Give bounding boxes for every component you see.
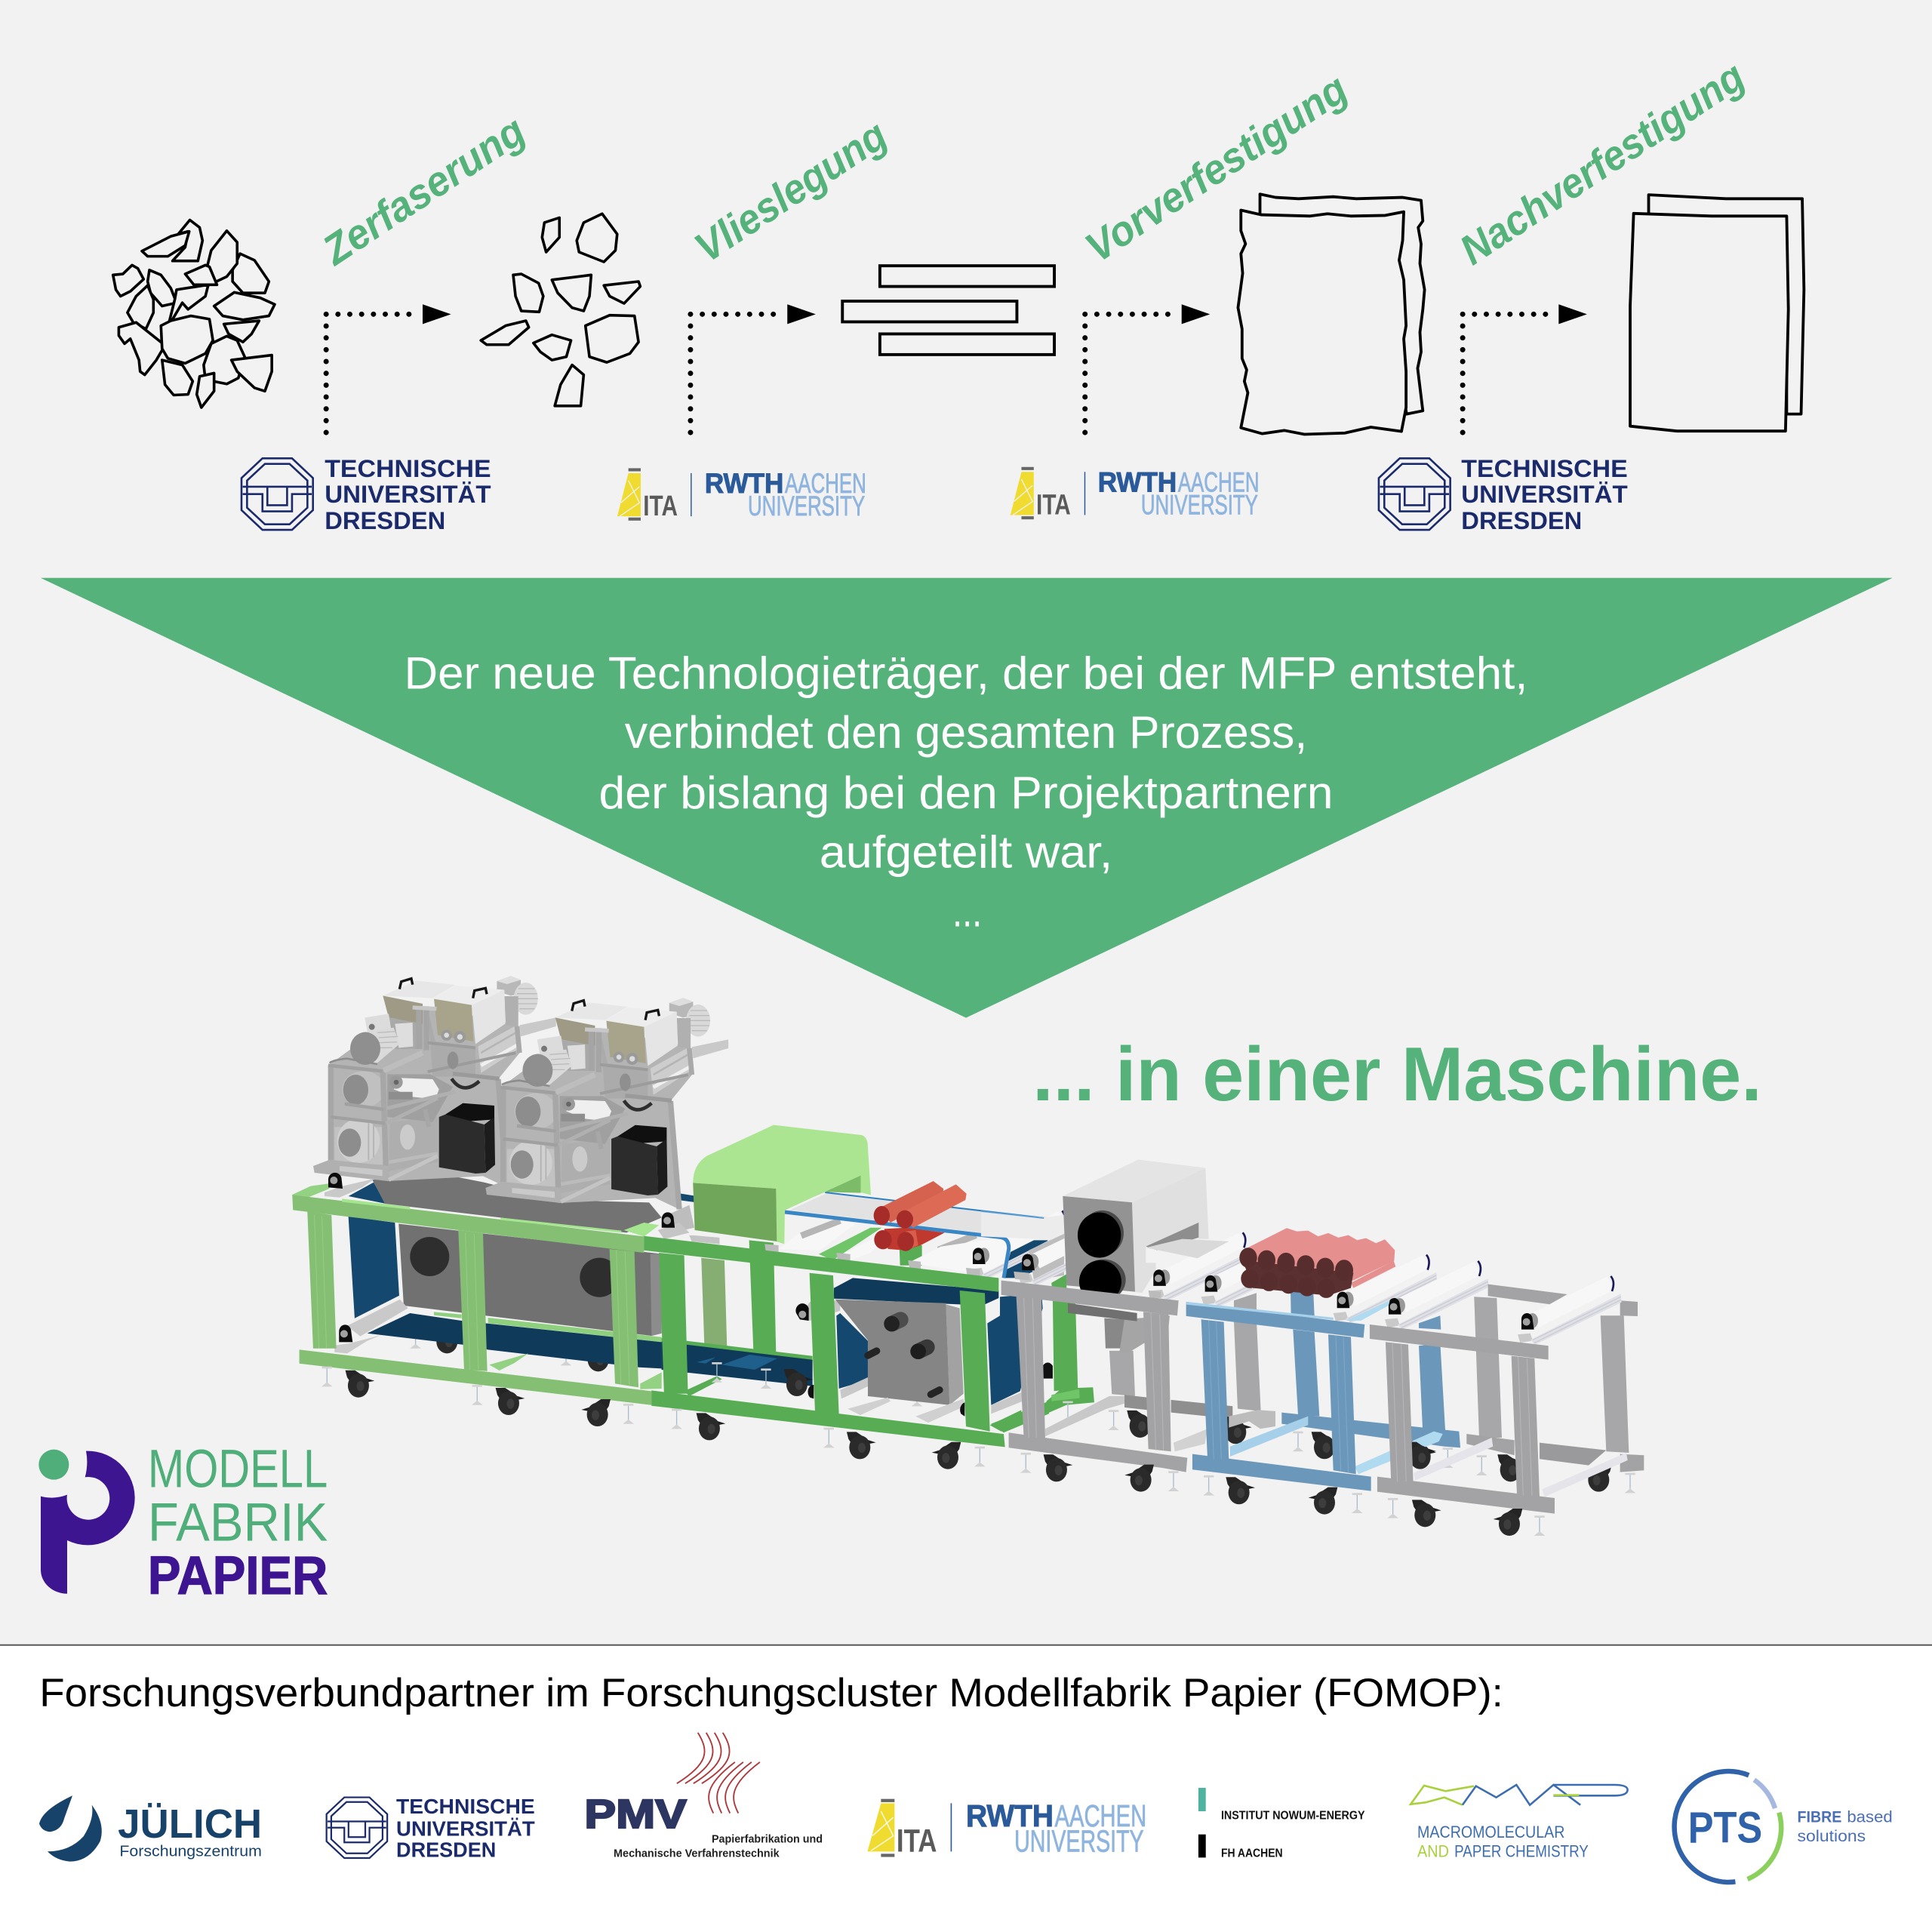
belt end (981, 1211, 1122, 1285)
conveyor rails and rollers below belt (692, 1211, 1073, 1279)
funnel text: Der neue Technologieträger, der bei der MFP entsteht, (405, 648, 1527, 699)
wordmark: PAPIER (148, 1546, 328, 1606)
step icon: wrinkled sheets (1238, 194, 1425, 435)
press rollers (1149, 1232, 1254, 1301)
logo: ITA RWTH footer: AACHEN (1055, 1798, 1146, 1833)
funnel text: verbindet den gesamten Prozess, (625, 706, 1307, 758)
logo: ITA RWTH footer: UNIVERSITY (1014, 1823, 1144, 1858)
logo: Nowum Energy FH Aachen: INSTITUT NOWUM-ENERGY (1221, 1810, 1365, 1823)
logo: ITA RWTH 2: AACHEN (1178, 466, 1260, 497)
suction module 2 (485, 998, 728, 1209)
logo: TU Dresden 2: DRESDEN (1461, 506, 1582, 534)
blue table rear (1230, 1288, 1460, 1474)
logo: ITA RWTH 2: UNIVERSITY (1141, 490, 1258, 521)
step icon: smooth finished sheets (1630, 195, 1804, 431)
funnel text: aufgeteilt war, (820, 826, 1112, 877)
logo: ITA RWTH 1 (617, 468, 866, 521)
panel: green funnel triangle (41, 578, 1893, 1018)
logo: PMV: PMV (584, 1792, 687, 1837)
icon: logo mark (38, 1450, 135, 1594)
step icon: separated fibres (481, 214, 640, 406)
light green frame (292, 1183, 662, 1426)
funnel text: der bislang bei den Projektpartnern (598, 767, 1334, 818)
logo: Jülich: JÜLICH (118, 1801, 262, 1847)
logo: ITA RWTH 2: ITA (1036, 489, 1071, 521)
blue table rollers and frame (1334, 1255, 1489, 1330)
rear legs and lower panels (662, 1240, 922, 1406)
step icon: laid fleece strips (842, 266, 1054, 355)
first grey table frame (1001, 1272, 1187, 1492)
hopper under conveyor (795, 1240, 1048, 1423)
wordmark: FABRIK (148, 1494, 328, 1553)
blue table frame (1186, 1300, 1390, 1515)
arrow: dotted 2 (691, 304, 816, 432)
machine base: blower box and blue panels (334, 1217, 662, 1371)
roller holders on light frame (325, 1173, 694, 1239)
headline: in einer Maschine: ... in einer Maschine. (1032, 1032, 1762, 1117)
step icon: fibre chips cluster (113, 220, 275, 408)
logo: ITA RWTH 1: RWTH (705, 468, 783, 499)
logo: PTS: FIBRE (1798, 1808, 1841, 1826)
logo: Nowum Energy FH Aachen: FH AACHEN (1221, 1847, 1283, 1860)
press underside (1068, 1303, 1170, 1352)
logo: ITA RWTH 1: ITA (643, 490, 678, 521)
logo: Macromolecular and Paper Chemistry: PAPER CHEMISTRY (1454, 1842, 1589, 1861)
logo: TU Dresden 1: TECHNISCHE (325, 454, 491, 482)
logo: TU Dresden footer: UNIVERSITÄT (396, 1817, 535, 1841)
funnel text (405, 648, 1527, 937)
logo: Modellfabrik Papier (38, 1440, 328, 1606)
process label: Vlieslegung: Vlieslegung (687, 111, 895, 271)
logo: PMV: Papierfabrikation und (712, 1834, 823, 1846)
logo: Macromolecular and Paper Chemistry: AND (1417, 1842, 1449, 1861)
press outlet plate (1146, 1239, 1229, 1258)
logo: TU Dresden footer: TECHNISCHE (396, 1795, 535, 1818)
red rolls (874, 1181, 967, 1251)
press and first grey table (981, 1160, 1275, 1492)
logo: ITA RWTH 1: AACHEN (785, 468, 866, 499)
logo: ITA RWTH footer (867, 1798, 1146, 1858)
belt (785, 1192, 1064, 1278)
logo: Jülich: Forschungszentrum (119, 1844, 262, 1860)
logo: ITA RWTH 2: RWTH (1098, 466, 1177, 497)
salmon rolls (1239, 1228, 1395, 1298)
logo: TU Dresden footer: DRESDEN (396, 1838, 496, 1861)
logo: PMV (584, 1733, 823, 1860)
wordmark (148, 1440, 328, 1606)
logo: PMV: Mechanische Verfahrenstechnik (614, 1847, 780, 1860)
logo: ITA RWTH footer: ITA (897, 1823, 937, 1858)
rollers behind salmon rolls (1201, 1238, 1305, 1307)
logo: PTS: based (1847, 1808, 1893, 1826)
arrow: dotted 1 (326, 304, 451, 432)
last grey table (1370, 1276, 1644, 1536)
logo: ITA RWTH 2 (1011, 466, 1260, 521)
logo: ITA RWTH footer: RWTH (966, 1798, 1054, 1833)
green hood (693, 1125, 871, 1244)
funnel text: ... (952, 885, 982, 937)
logo: TU Dresden 1: DRESDEN (325, 506, 445, 534)
process label: Zerfaserung: Zerfaserung (313, 107, 534, 275)
back of first table (991, 1274, 1275, 1451)
footer heading: Forschungsverbundpartner im Forschungscluster Modellfabrik Papier (FOMOP): (39, 1671, 1503, 1715)
green frame (644, 1235, 1021, 1469)
logo: PTS (1675, 1771, 1893, 1882)
logo: Macromolecular and Paper Chemistry (1411, 1785, 1628, 1861)
logo: TU Dresden 2: UNIVERSITÄT (1461, 480, 1628, 508)
logo: TU Dresden 2 (1379, 454, 1628, 534)
logo: TU Dresden 1: UNIVERSITÄT (325, 480, 491, 508)
middle section: green frame, hood, belt, hopper (644, 1125, 1073, 1469)
machine: hopper top (349, 1162, 697, 1232)
suction module 1 (313, 976, 556, 1187)
footer panel (0, 1644, 1932, 1932)
logo: TU Dresden 2: TECHNISCHE (1461, 454, 1628, 482)
logo: TU Dresden 1 (242, 454, 491, 534)
logo: PTS: PTS (1688, 1804, 1762, 1853)
arrow: dotted 4 (1463, 304, 1587, 432)
logo: Nowum Energy FH Aachen (1198, 1788, 1365, 1860)
logo: Jülich (39, 1795, 262, 1862)
logo: ITA RWTH 1: UNIVERSITY (748, 491, 865, 521)
arrow: dotted 3 (1085, 304, 1210, 432)
wordmark: MODELL (148, 1440, 328, 1500)
logo: PTS: solutions (1798, 1828, 1866, 1845)
process label: Nachverfestigung: Nachverfestigung (1451, 52, 1753, 274)
machine (292, 976, 1644, 1536)
press box (1063, 1160, 1209, 1303)
process label: Vorverfestigung: Vorverfestigung (1077, 65, 1355, 271)
logo: Macromolecular and Paper Chemistry: MACROMOLECULAR (1417, 1823, 1564, 1841)
logo: TU Dresden footer (327, 1795, 535, 1861)
